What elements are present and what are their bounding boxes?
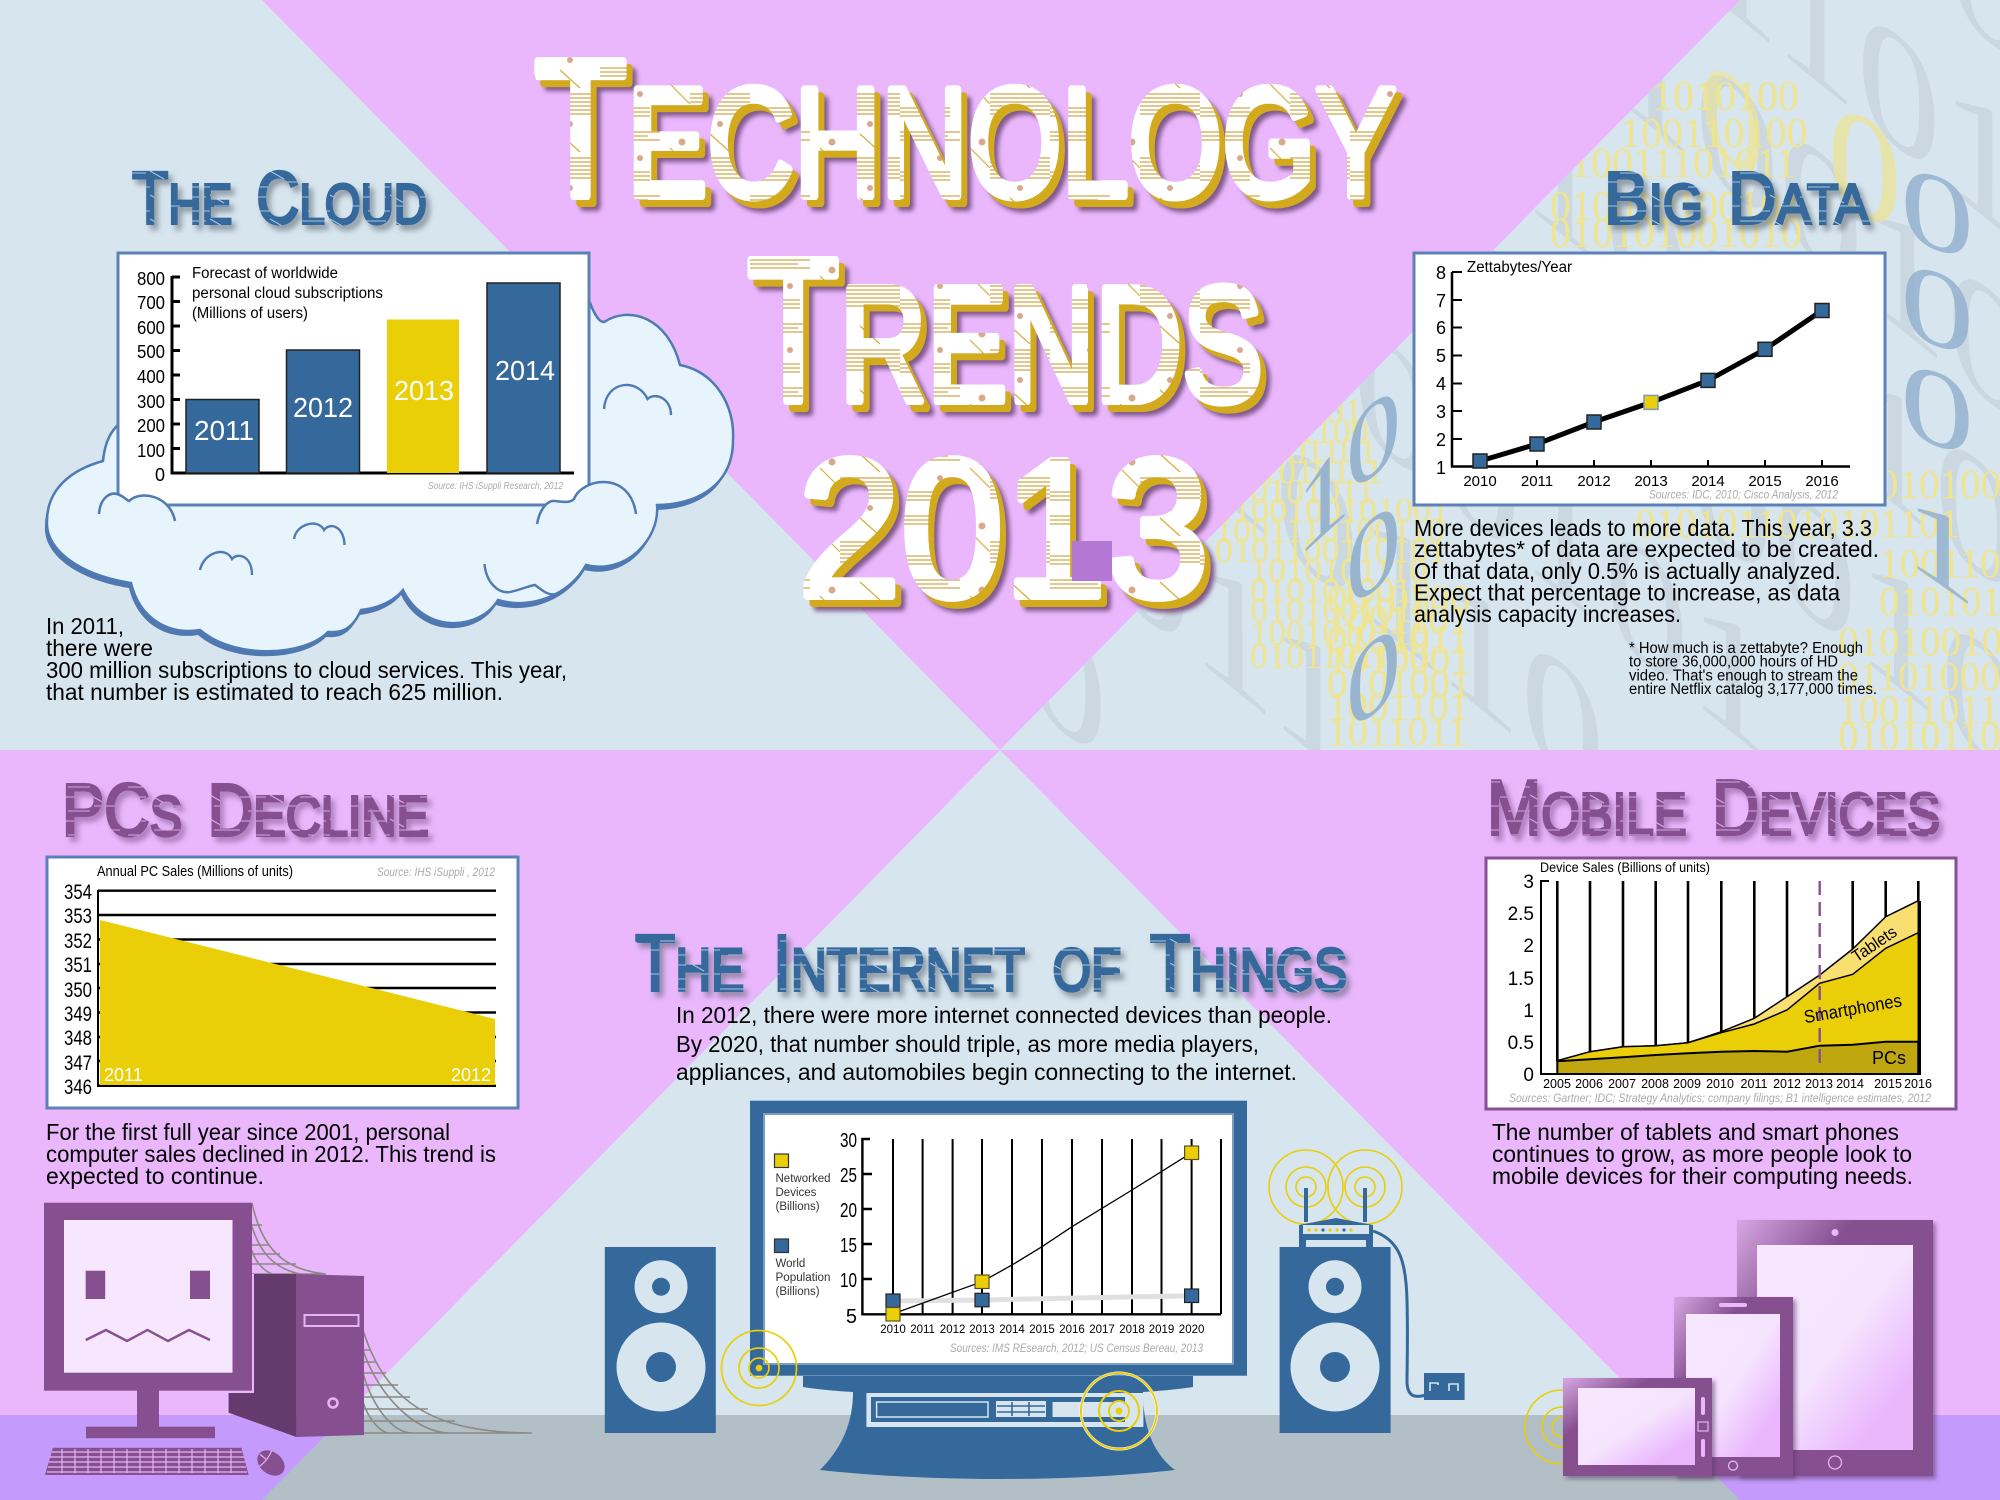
mouse [252, 1445, 290, 1481]
axis: 600 [137, 318, 165, 338]
binary code backdrop: 0100100101001 [1215, 490, 1449, 530]
text: mobile summary: mobile devices for their computing needs. [1492, 1163, 1913, 1189]
text: pc decline summary: For the first full year since 2001, personal [46, 1119, 450, 1145]
icon: purple square [1072, 541, 1112, 581]
axis: 2015 [1748, 473, 1782, 490]
text: cloud summary: In 2011, [46, 613, 124, 639]
binary code backdrop: 0 [1900, 139, 1974, 287]
binary code backdrop: 0 [1900, 335, 1974, 483]
axis: 800 [137, 269, 165, 289]
text: iot summary [676, 1002, 1332, 1085]
title line: 2013: 2013 [798, 419, 1209, 638]
binary code backdrop: 0 [1346, 595, 1401, 760]
binary code backdrop: 1010111 [1260, 451, 1383, 491]
axis: 400 [137, 367, 165, 387]
legend: (Billions) [776, 1201, 820, 1213]
series label: pcs: PCs [1872, 1048, 1906, 1068]
axis: 2011 [1521, 473, 1553, 490]
area: tablets [1557, 901, 1918, 1074]
text: big data summary: zettabytes* of data are expected to be created. [1414, 536, 1879, 562]
binary code backdrop: 0101101100 [1250, 636, 1427, 676]
text: big data summary: More devices leads to more data. This year, 3.3 [1414, 515, 1872, 541]
chart title: Annual PC Sales (Millions of units) [97, 864, 293, 880]
binary code backdrop: 01010010 [1838, 618, 2000, 664]
title line: Trends: TRENDS [747, 216, 1263, 445]
text: iot summary: By 2020, that number should triple, as more media players, [676, 1031, 1259, 1057]
axis: 700 [137, 293, 165, 313]
heading: big data: BIG DATA [1604, 156, 1869, 240]
y labels: 20 [840, 1200, 857, 1222]
bars: 2014 [495, 355, 555, 386]
text: iot summary: appliances, and automobiles begin connecting to the internet. [676, 1059, 1297, 1085]
icon: tablets and phone [1563, 1220, 1933, 1476]
source: Sources: IDC, 2010; Cisco Analysis, 2012 [1649, 488, 1838, 502]
grid [893, 1139, 1221, 1314]
binary code backdrop: 1001101 [1327, 683, 1469, 729]
y labels [64, 881, 92, 1099]
bars [186, 283, 560, 473]
legend: Networked [776, 1173, 830, 1185]
binary code backdrop: 010101001010 [1550, 211, 1802, 257]
icon: television [750, 1101, 1247, 1479]
text: zettabyte footnote [1629, 640, 1877, 698]
title [534, 19, 1396, 638]
area: sales decline [100, 920, 495, 1085]
binary code backdrop: 10011101011 [1570, 141, 1796, 187]
y labels: 1 [1523, 1001, 1534, 1022]
heading: internet of things: THE INTERNET OF THINGS [635, 918, 1347, 1008]
axis: 2013 [1634, 473, 1668, 490]
series: networked devices [886, 1146, 1199, 1321]
y labels: 15 [840, 1235, 857, 1257]
binary code backdrop: 01101000 [1838, 653, 2000, 699]
icon: left speaker [605, 1247, 716, 1433]
y labels: 347 [64, 1052, 92, 1075]
chart card: device sales [1486, 858, 1956, 1109]
x labels: 2016 [1904, 1077, 1932, 1091]
y labels: 0.5 [1508, 1033, 1534, 1054]
binary code backdrop: 1001101 [1327, 596, 1469, 642]
x labels [880, 1324, 1204, 1336]
source: Source: IHS iSuppli , 2012 [377, 865, 495, 879]
legend: (Billions) [776, 1286, 820, 1298]
x labels: 2017 [1089, 1324, 1115, 1336]
panel: big data [1414, 156, 1885, 698]
text: mobile summary [1492, 1119, 1913, 1189]
axis: 2 [1436, 430, 1446, 450]
binary code backdrop: 0 [1827, 67, 1902, 268]
text: big data summary [1414, 515, 1879, 627]
axes [1541, 881, 1920, 1074]
binary code backdrop: 010100 [1878, 461, 2000, 507]
chart title [192, 265, 383, 322]
binary code backdrop: 1010001 [1327, 636, 1470, 682]
legend: Devices [776, 1187, 817, 1199]
x labels: 2009 [1673, 1077, 1701, 1091]
axis: 4 [1436, 374, 1446, 394]
cloud lobes over card [99, 482, 636, 535]
binary code backdrop: 01100 [1280, 411, 1369, 451]
text: cloud summary: 300 million subscriptions to cloud services. This year, [46, 657, 567, 683]
chart: networked devices vs population [774, 1130, 1221, 1355]
y labels: 2 [1523, 936, 1534, 957]
icon: wifi rings on media player [1081, 1373, 1157, 1449]
heading: pcs decline: PCS DECLINE [62, 768, 429, 852]
line series [1473, 304, 1829, 468]
binary code backdrop: 0 [1346, 472, 1401, 637]
binary code backdrop: 0010100 [1327, 576, 1470, 622]
small tablet [1563, 1378, 1712, 1476]
axis: 7 [1436, 291, 1446, 311]
binary code backdrop: 0101001010 [1250, 590, 1430, 630]
axis: 300 [137, 392, 165, 412]
axis: 0 [155, 465, 165, 485]
icon: right speaker [1280, 1247, 1391, 1433]
chart title: Device Sales (Billions of units) [1540, 859, 1710, 875]
axis: 100 [137, 441, 165, 461]
icon: router with signal [1269, 1150, 1402, 1247]
icon: cloud [45, 303, 733, 656]
y labels: 2.5 [1508, 904, 1534, 925]
icon: wifi rings behind tablet [1525, 1390, 1599, 1464]
binary code backdrop: 10010110 [939, 120, 1605, 846]
binary code backdrop: 1 [1905, 462, 1977, 634]
chart title: Forecast of worldwide [192, 265, 338, 282]
binary code backdrop: 0 [1700, 25, 1765, 214]
x labels: 2015 [1874, 1077, 1902, 1091]
x labels: 2011 [910, 1324, 935, 1336]
text: big data summary: Expect that percentage to increase, as data [1414, 580, 1840, 606]
y labels: 30 [840, 1130, 857, 1152]
bars: 2013 [394, 375, 454, 406]
axis: 200 [137, 416, 165, 436]
text: mobile summary: The number of tablets and smart phones [1492, 1119, 1899, 1145]
y labels: 353 [64, 905, 92, 928]
axis [137, 269, 574, 485]
axis [1436, 263, 1850, 490]
x labels: 2014 [999, 1324, 1025, 1336]
legend: Population [776, 1272, 830, 1284]
icon: sad computer [44, 1203, 364, 1481]
y labels: 25 [840, 1165, 857, 1187]
text: pc decline summary [46, 1119, 496, 1189]
text: zettabyte footnote: to store 36,000,000 hours of HD [1629, 654, 1838, 670]
axis: 2014 [1691, 473, 1725, 490]
icon: cobwebs [250, 1203, 532, 1433]
heading: the cloud: THE CLOUD [132, 156, 427, 240]
chart card: annual pc sales [47, 857, 518, 1108]
panel: internet of things [605, 918, 1465, 1479]
icon: power outlet [1424, 1373, 1465, 1400]
bars: 2012 [293, 392, 353, 423]
binary code backdrop: 0101011010101101 [1635, 500, 1960, 546]
text: iot summary: In 2012, there were more internet connected devices than people. [676, 1002, 1332, 1028]
text: cloud summary [46, 613, 567, 705]
large tablet [1737, 1220, 1933, 1476]
text: zettabyte footnote: * How much is a zettabyte? Enough [1629, 640, 1863, 657]
tv stand [803, 1376, 1193, 1479]
binary code backdrop: 1001110100110 [1215, 510, 1445, 550]
chart title: personal cloud subscriptions [192, 285, 383, 302]
icon: cable [1373, 1231, 1426, 1396]
binary code backdrop: 1001010110 [1250, 613, 1429, 653]
binary code backdrop: 0 [1346, 357, 1401, 522]
x labels: 2010 [1706, 1077, 1734, 1091]
title line: Technology: TECHNOLOGY [534, 19, 1396, 238]
source: Sources: Gartner; IDC; Strategy Analytics; company filings; B1 intelligence estimates, 2012 [1509, 1091, 1931, 1105]
legend [774, 1154, 830, 1298]
icon: wifi rings on speaker [722, 1330, 796, 1406]
y labels: 351 [64, 954, 92, 977]
binary code backdrop: 0 [1900, 235, 1974, 383]
binary code backdrop: 0101011 [1327, 616, 1469, 662]
panel: mobile devices [1486, 764, 1956, 1476]
y labels: 346 [64, 1076, 92, 1099]
x labels: 2014 [1836, 1077, 1864, 1091]
binary code backdrop: 1010100 [1652, 74, 1799, 120]
x labels: 2010 [880, 1324, 906, 1336]
binary code backdrop: 10011011 [1838, 686, 1999, 732]
binary code backdrop: 01011 [939, 300, 1353, 822]
monitor [44, 1203, 253, 1392]
x labels: 2020 [1179, 1324, 1204, 1336]
area labels: 2011 [104, 1065, 143, 1085]
binary code backdrop: 0101 [1290, 391, 1362, 431]
chart card: zettabytes per year [1414, 253, 1885, 505]
axis: 3 [1436, 402, 1446, 422]
binary code backdrop: 0101001 [1327, 660, 1470, 706]
series: world population [886, 1289, 1199, 1308]
text: big data summary: analysis capacity increases. [1414, 601, 1681, 627]
binary code backdrop: 0101011 [1250, 471, 1375, 511]
text: mobile summary: continues to grow, as more people look to [1492, 1141, 1912, 1167]
tv screen [764, 1114, 1233, 1364]
phone [1674, 1297, 1793, 1476]
axis: 1 [1436, 458, 1446, 478]
y labels: 0 [1523, 1065, 1534, 1086]
tv frame [750, 1101, 1247, 1376]
y labels: 5 [846, 1306, 857, 1328]
text: pc decline summary: expected to continue. [46, 1163, 264, 1189]
x labels: 2012 [1773, 1077, 1801, 1091]
panel: the cloud [45, 156, 733, 705]
media player [866, 1393, 1143, 1427]
y labels: 348 [64, 1027, 92, 1050]
y labels [1508, 872, 1534, 1086]
axis: 2016 [1805, 473, 1839, 490]
x labels: 2018 [1119, 1324, 1145, 1336]
x labels: 2006 [1575, 1077, 1603, 1091]
binary code backdrop: 0101100110101 [1215, 530, 1446, 570]
monitor stand [86, 1390, 215, 1438]
text: zettabyte footnote: entire Netflix catalog 3,177,000 times. [1629, 681, 1877, 698]
source: Source: IHS iSuppli Research, 2012 [428, 481, 563, 492]
axis: 8 [1436, 263, 1446, 283]
area: pcs [1557, 1042, 1918, 1074]
binary code backdrop: 001101 [1270, 431, 1377, 471]
grid [98, 891, 496, 1086]
x labels: 2007 [1608, 1077, 1636, 1091]
source: Sources: IMS REsearch, 2012; US Census Bereau, 2013 [950, 1341, 1203, 1355]
area label 2012: 2012 [451, 1065, 491, 1085]
x labels: 2013 [1805, 1077, 1833, 1091]
chart card: cloud subscriptions [118, 253, 589, 505]
x labels: 2011 [1741, 1077, 1767, 1091]
grid [1557, 881, 1918, 1061]
binary code backdrop: 1010101110 [1250, 550, 1427, 590]
axis: 2012 [1577, 473, 1611, 490]
binary code backdrop: 100110100 [1620, 111, 1807, 157]
axis: 5 [1436, 346, 1446, 366]
text: pc decline summary: computer sales declined in 2012. This trend is [46, 1141, 496, 1167]
series label: smartphones: Smartphones [1802, 990, 1903, 1027]
axis: 6 [1436, 318, 1446, 338]
chart title: (Millions of users) [192, 305, 308, 322]
binary code backdrop: 0101010010 [1250, 570, 1430, 610]
x labels: 2015 [1029, 1324, 1055, 1336]
text: cloud summary: that number is estimated to reach 625 million. [46, 679, 503, 705]
y labels: 354 [64, 881, 92, 904]
y labels: 352 [64, 930, 92, 953]
binary code backdrop: 100110 [1879, 540, 2000, 586]
keyboard [45, 1448, 249, 1475]
text: zettabyte footnote: video. That's enough to stream the [1629, 668, 1858, 684]
x labels: 2005 [1543, 1077, 1571, 1091]
panel: pcs decline [44, 768, 532, 1481]
2013 marker [1818, 881, 1821, 1066]
heading: mobile devices: MOBILE DEVICES [1487, 764, 1940, 852]
legend: World [776, 1258, 805, 1270]
text: cloud summary: there were [46, 635, 153, 661]
tower [229, 1274, 364, 1437]
y labels: 350 [64, 979, 92, 1002]
bars: 2011 [194, 415, 254, 446]
y labels [840, 1130, 857, 1328]
area: smartphones [1557, 933, 1918, 1074]
y labels: 1.5 [1508, 969, 1534, 990]
x labels: 2019 [1149, 1324, 1174, 1336]
y labels: 10 [840, 1270, 857, 1292]
binary code backdrop: 010010100101 [1550, 184, 1802, 230]
y labels: 349 [64, 1003, 92, 1026]
series label: tablets: Tablets [1848, 922, 1900, 966]
x labels: 2016 [1059, 1324, 1085, 1336]
x labels: 2013 [969, 1324, 995, 1336]
binary code backdrop: 01010110 [1838, 713, 2000, 759]
x labels: 2008 [1641, 1077, 1669, 1091]
axis: 500 [137, 342, 165, 362]
binary code backdrop: 1011011 [1327, 708, 1467, 754]
binary code backdrop: 1 [1296, 413, 1351, 584]
x labels [1543, 1077, 1932, 1091]
y labels: 3 [1523, 872, 1534, 893]
binary code backdrop: 10 [939, 480, 1107, 803]
x labels: 2012 [940, 1324, 965, 1336]
text: big data summary: Of that data, only 0.5% is actually analyzed. [1414, 558, 1841, 584]
axis: 2010 [1463, 473, 1497, 490]
binary code backdrop: 010101 [1879, 578, 2000, 624]
chart title: Zettabytes/Year [1467, 259, 1572, 276]
